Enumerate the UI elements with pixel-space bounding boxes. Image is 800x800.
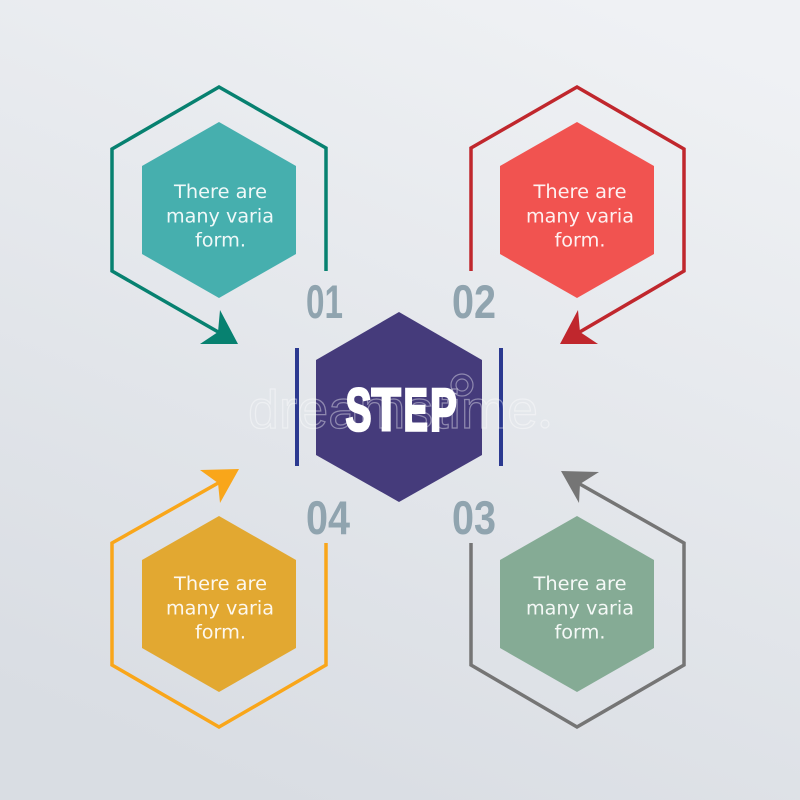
- text 03: There are: [532, 574, 626, 595]
- text 04: There are: [173, 574, 267, 595]
- text 03: form.: [554, 622, 606, 644]
- text 04: form.: [195, 622, 246, 644]
- outline arrow 03: [471, 483, 684, 727]
- text 04: [166, 574, 274, 644]
- step 01: teal: [112, 87, 326, 344]
- text 01: There are: [173, 182, 267, 203]
- text 01: [166, 182, 274, 252]
- text 02: many varia: [526, 206, 634, 228]
- center label: E: [404, 376, 428, 444]
- outline arrow 01: [112, 87, 326, 333]
- text 03: [526, 574, 634, 644]
- center label: S: [346, 376, 372, 444]
- number 01: 01: [306, 275, 343, 328]
- arrowhead 01: [200, 310, 238, 344]
- hexagon 02: [500, 122, 654, 298]
- step 04: orange: [112, 469, 326, 727]
- arrowhead 04: [200, 469, 239, 503]
- center hexagon: [316, 312, 482, 502]
- number 03: 03: [452, 491, 496, 544]
- text 01: form.: [195, 230, 246, 252]
- outline arrow 04: [112, 482, 326, 727]
- step 03: gray-green: [471, 471, 684, 727]
- text 01: many varia: [166, 206, 274, 228]
- center label: P: [430, 376, 457, 443]
- center label: [346, 376, 457, 444]
- arrowhead 02: [560, 310, 598, 344]
- outline arrow 02: [471, 87, 684, 333]
- number 02: 02: [452, 275, 496, 328]
- text 02: There are: [532, 182, 626, 203]
- hexagon 04: [142, 516, 296, 692]
- right bar: [499, 348, 503, 466]
- hexagon 01: [142, 122, 296, 298]
- left bar: [295, 348, 299, 466]
- step 02: red: [471, 87, 684, 344]
- text 02: [526, 182, 634, 252]
- watermark: dreamstime: [248, 380, 538, 440]
- hexagon 03: [500, 516, 654, 692]
- text 04: many varia: [166, 598, 274, 620]
- center label: T: [372, 376, 401, 444]
- arrowhead 03: [561, 471, 599, 503]
- text 02: form.: [554, 230, 606, 252]
- number 04: 04: [306, 491, 350, 544]
- text 03: many varia: [526, 598, 634, 620]
